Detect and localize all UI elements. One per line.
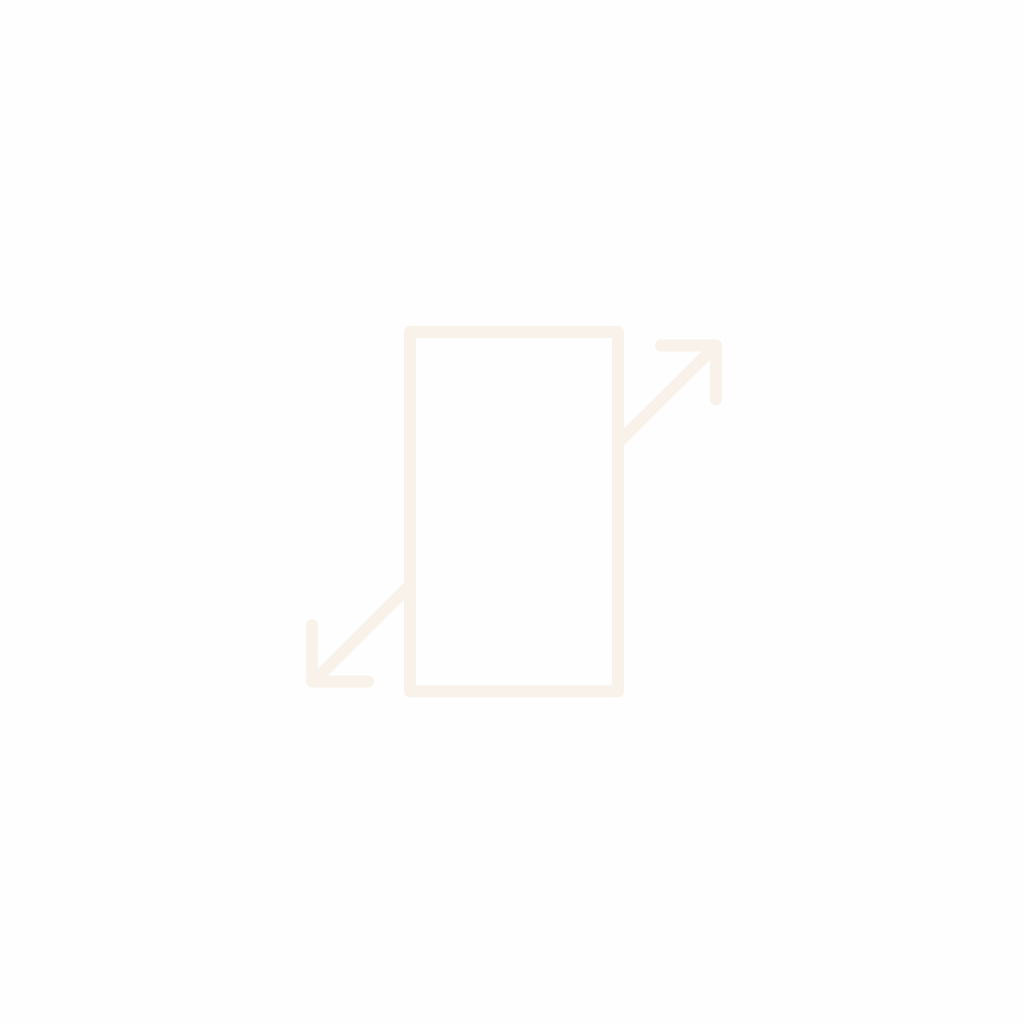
arrow: down-left	[312, 585, 410, 682]
rectangle outline	[410, 332, 618, 691]
icon group	[312, 332, 716, 691]
arrow: up-right	[618, 346, 716, 443]
